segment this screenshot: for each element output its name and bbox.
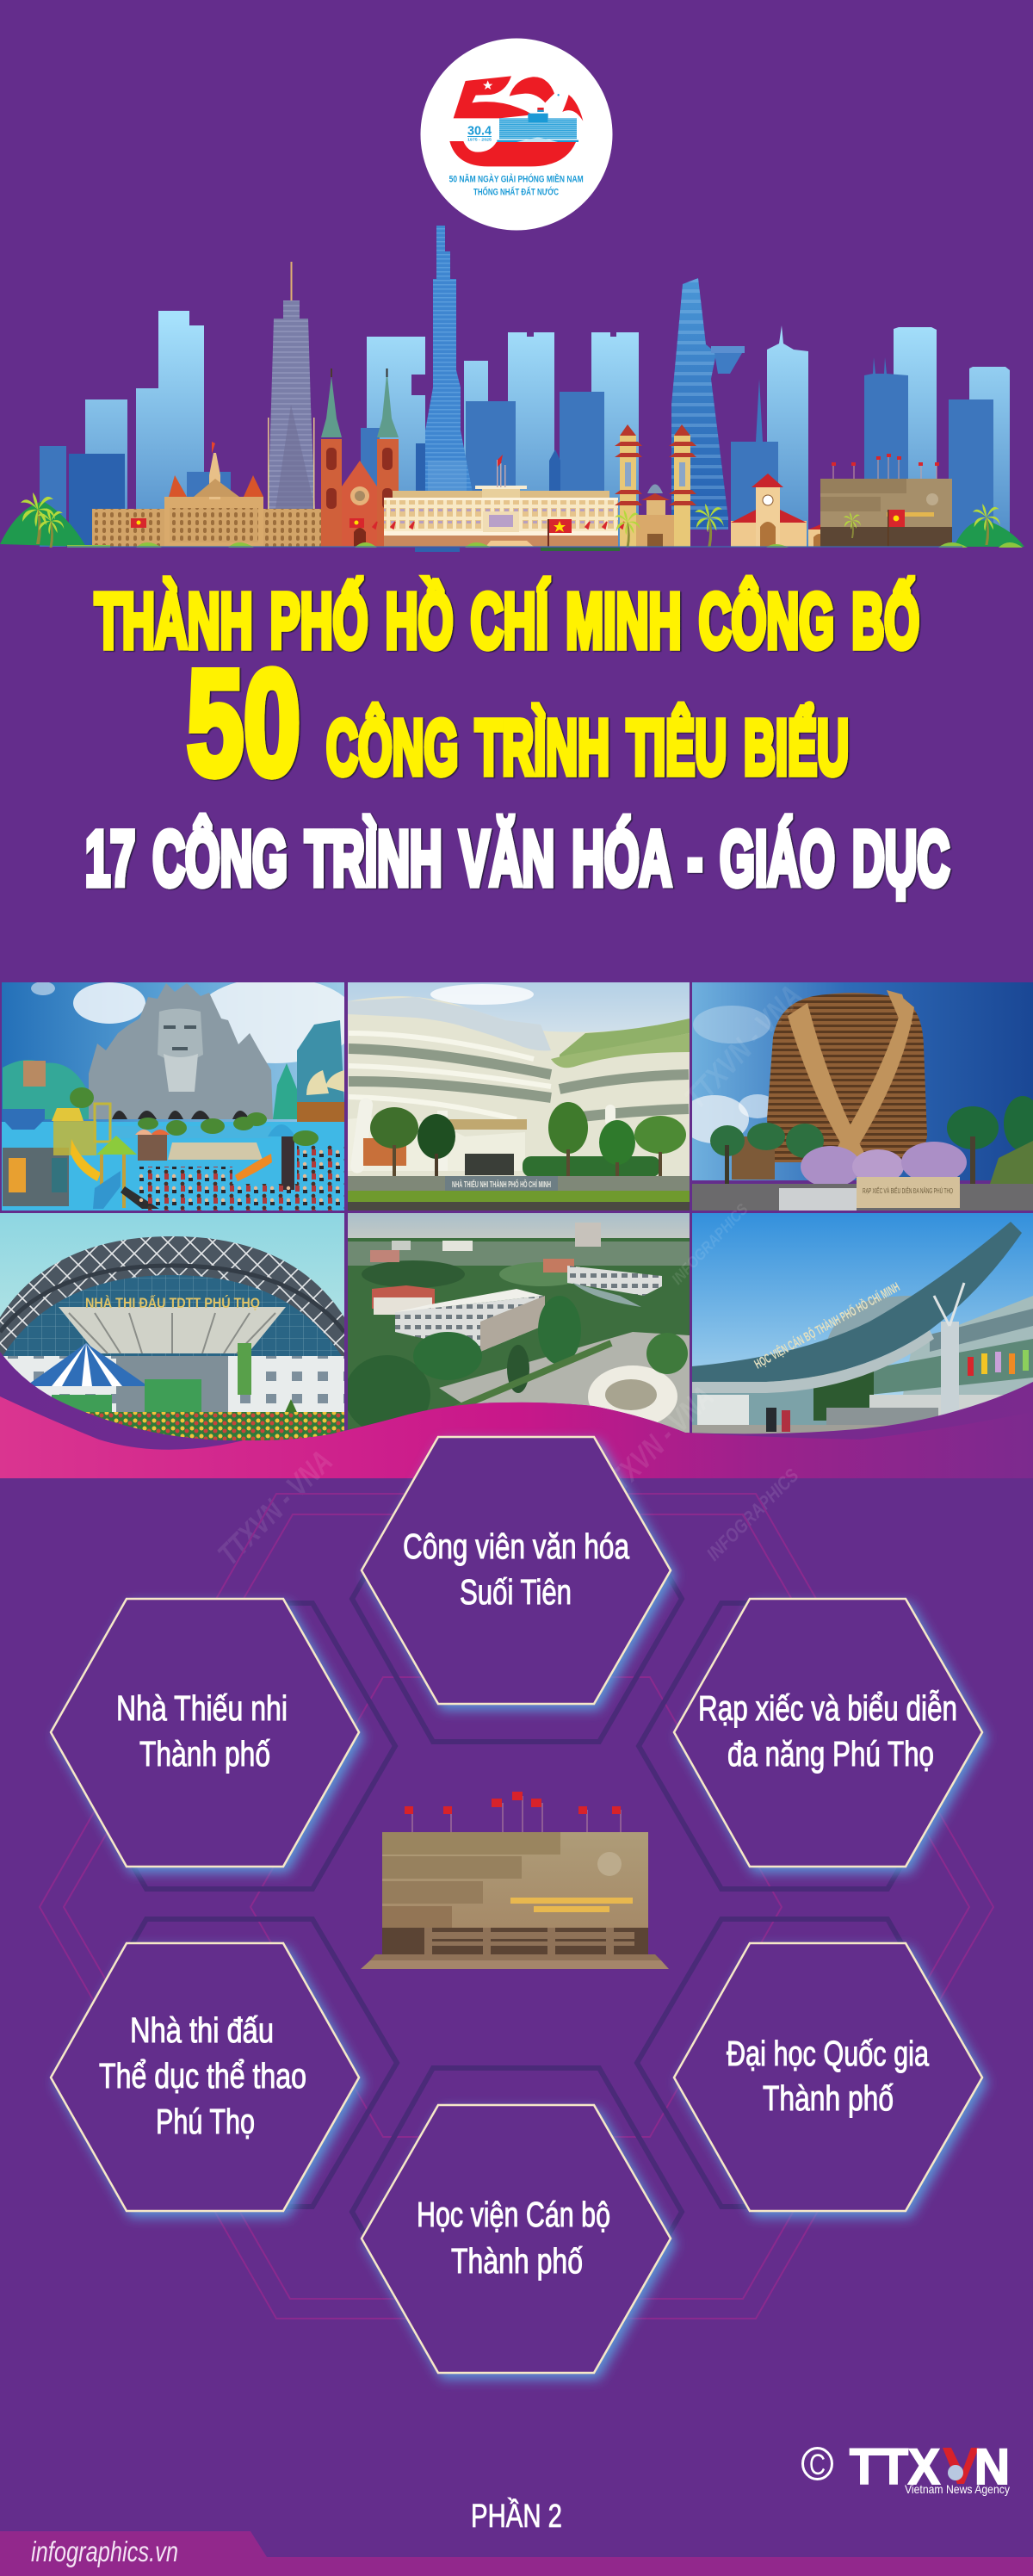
part label: PHẦN 2 xyxy=(471,2497,562,2535)
wave: purple crescent under photos xyxy=(0,1352,1033,1478)
City Hall xyxy=(92,442,339,547)
hexagon: Rap xiec va bieu dien xyxy=(674,1599,982,1867)
Notre Dame cathedral xyxy=(321,368,399,547)
flags xyxy=(131,510,905,547)
photo: Phu Tho circus xyxy=(680,982,1033,1211)
city skyline illustration xyxy=(0,226,1024,552)
photo: Suoi Tien park xyxy=(2,977,357,1211)
mid blue towers xyxy=(40,357,993,547)
notch in tower xyxy=(411,375,426,395)
hexagon: Nha thi dau xyxy=(51,1943,359,2211)
building ground floor xyxy=(382,1928,648,1954)
hexagon: Nha thi dau: Nhà thi đấu xyxy=(130,2010,274,2050)
photo: Phu Tho circus: RẠP XIẾC VÀ BIỂU DIỄN ĐA NĂNG PHÚ THỌ xyxy=(863,1186,953,1195)
watermarks xyxy=(211,978,809,1572)
Vietcombank tower xyxy=(268,262,315,509)
thin pink hexagon outlines xyxy=(40,1494,993,2319)
copyright and TTXVN logo: Vietnam News Agency xyxy=(905,2482,1010,2496)
photo: Children's House xyxy=(348,982,690,1211)
logo: 50th anniversary emblem xyxy=(420,38,613,231)
building steps xyxy=(370,1954,661,1960)
photo: Children's House: NHÀ THIẾU NHI THÀNH PHỐ HỒ CHÍ MINH xyxy=(452,1178,551,1190)
big number 50: 50 xyxy=(187,639,300,806)
hexagon: Nha thi dau: Thể dục thể thao xyxy=(99,2056,306,2096)
logo: 50th anniversary emblem: 50 NĂM NGÀY GIẢI PHÓNG MIỀN NAM xyxy=(449,174,584,185)
Cao Dai temple towers xyxy=(615,424,696,547)
logo: 50th anniversary emblem: 30.4 xyxy=(467,125,492,139)
watermarks: INFOGRAPHICS xyxy=(668,1200,752,1288)
title xyxy=(85,577,949,902)
logo: 50th anniversary emblem: 1975 - 2025 xyxy=(467,138,492,142)
hexagon: Rap xiec va bieu dien: đa năng Phú Thọ xyxy=(727,1734,934,1774)
footer bar xyxy=(0,2531,1033,2576)
central building: circus theatre xyxy=(361,1792,669,1969)
photo: Phu Tho gymnasium xyxy=(0,1213,344,1446)
hexagon: Dai hoc Quoc gia: Thành phố xyxy=(763,2078,894,2118)
light blue background towers xyxy=(85,311,1010,547)
hexagon: Hoc vien Can bo xyxy=(362,2105,671,2373)
hexagon: Hoc vien Can bo: Thành phố xyxy=(451,2241,583,2281)
hexagon: Dai hoc Quoc gia: Đại học Quốc gia xyxy=(727,2034,929,2073)
footer bar: infographics.vn xyxy=(31,2536,178,2567)
hexagon: Dai hoc Quoc gia xyxy=(674,1943,982,2211)
Reunification Palace xyxy=(384,455,618,547)
hexagon: Rap xiec va bieu dien: Rạp xiếc và biểu diễn xyxy=(698,1688,957,1728)
photo: Cadre Academy xyxy=(692,1213,1033,1439)
circus theatre small xyxy=(820,454,952,547)
copyright and TTXVN logo: C xyxy=(809,2449,826,2481)
copyright and TTXVN logo xyxy=(802,2439,1010,2496)
green hills left and right xyxy=(0,501,86,547)
hexagon: Nha Thieu nhi Thanh pho: Nhà Thiếu nhi xyxy=(116,1688,288,1728)
hexagon: Cong vien van hoa Suoi Tien: Công viên văn hóa xyxy=(403,1526,629,1566)
watermarks: TTXVN - VNA xyxy=(211,1443,339,1572)
wave: magenta band xyxy=(0,1396,1033,1478)
dark blue towers xyxy=(69,443,560,547)
building flags xyxy=(405,1792,621,1832)
logo: 50th anniversary emblem: THỐNG NHẤT ĐẤT NƯỚC xyxy=(473,186,559,198)
Landmark 81 tower xyxy=(425,226,473,517)
copyright and TTXVN logo: TTX xyxy=(850,2439,940,2495)
watermarks: TTXVN - VNA xyxy=(677,978,809,1115)
dark offset hexagons xyxy=(64,1456,970,2355)
hexagon: Hoc vien Can bo: Học viện Cán bộ xyxy=(417,2195,610,2234)
palm trees xyxy=(21,492,1000,548)
Ben Thanh market xyxy=(731,474,878,547)
watermarks: INFOGRAPHICS xyxy=(425,1446,504,1526)
copyright and TTXVN logo: N xyxy=(974,2439,1010,2495)
hexagon: Nha thi dau: Phú Thọ xyxy=(156,2102,255,2141)
hexagon: Cong vien van hoa Suoi Tien: Suối Tiên xyxy=(460,1572,572,1612)
watermarks: TTXVN - VNA xyxy=(592,1378,721,1508)
hexagon: Cong vien van hoa Suoi Tien xyxy=(362,1437,671,1704)
Bitexco tower xyxy=(671,278,745,529)
photo: National University campus xyxy=(344,1213,690,1440)
hexagon: Nha Thieu nhi Thanh pho xyxy=(51,1599,359,1867)
photo: Phu Tho gymnasium: NHÀ THI ĐẤU TDTT PHÚ THỌ xyxy=(85,1295,260,1311)
building facade xyxy=(382,1832,648,1928)
watermarks: INFOGRAPHICS xyxy=(702,1464,803,1565)
ground shrubs xyxy=(67,542,1023,548)
hexagon: Nha Thieu nhi Thanh pho: Thành phố xyxy=(139,1734,270,1774)
photo: Cadre Academy: HỌC VIỆN CÁN BỘ THÀNH PHỐ HỒ CHÍ MINH xyxy=(752,1279,902,1372)
